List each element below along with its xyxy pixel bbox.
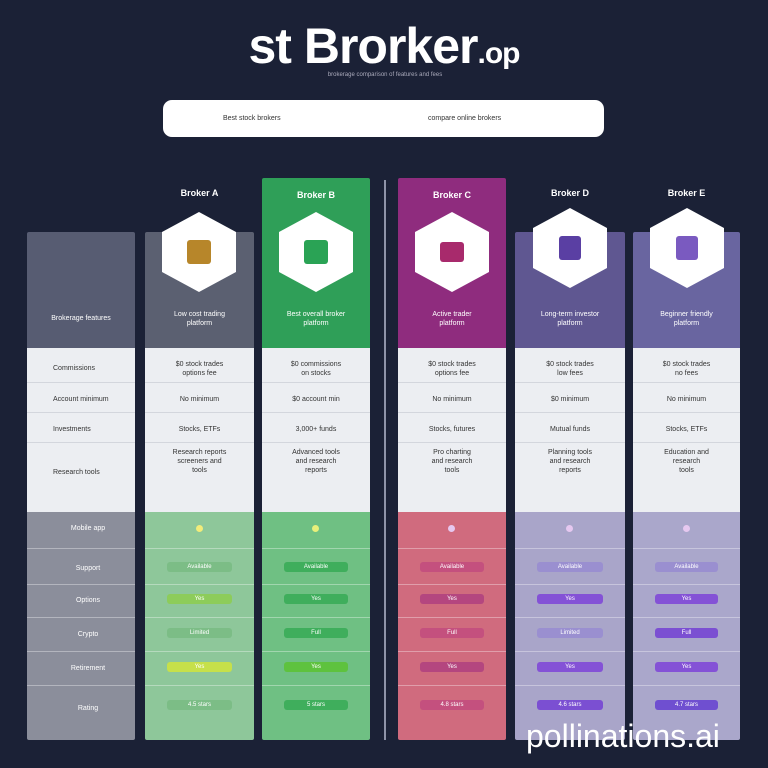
text: Yes bbox=[682, 596, 691, 602]
text: Yes bbox=[682, 664, 691, 670]
column 3 (magenta): and research bbox=[432, 458, 472, 465]
column 2 (highlight green): on stocks bbox=[301, 370, 331, 377]
column 3 (magenta): platform bbox=[439, 320, 465, 327]
text: research bbox=[673, 458, 700, 465]
subtitle: brokerage comparison of features and fees bbox=[328, 72, 442, 78]
text: Available bbox=[674, 564, 699, 570]
column 0: feature labels: Crypto bbox=[78, 631, 98, 638]
text: Beginner friendly bbox=[660, 311, 713, 318]
column 0: feature labels: Support bbox=[76, 565, 100, 572]
text: $0 minimum bbox=[551, 396, 589, 403]
column 0: feature labels: Brokerage features bbox=[51, 315, 111, 322]
column 2 (highlight green): Broker B bbox=[297, 190, 335, 200]
text: $0 stock trades bbox=[546, 361, 594, 368]
column 0: feature labels: Mobile app bbox=[71, 525, 105, 532]
text: Stocks, ETFs bbox=[179, 426, 220, 433]
icon hex 3 bbox=[415, 212, 489, 292]
text: 4.6 stars bbox=[558, 702, 582, 708]
text: platform bbox=[557, 320, 583, 327]
search bar: Best stock brokers bbox=[223, 115, 281, 122]
column 1: Broker A bbox=[181, 188, 218, 198]
column 2 (highlight green): Full bbox=[311, 630, 321, 636]
text: Low cost trading bbox=[174, 311, 225, 318]
text: $0 stock trades bbox=[176, 361, 223, 368]
column 3 (magenta) bbox=[398, 178, 506, 740]
text: Yes bbox=[195, 664, 204, 670]
column 0: feature labels: Options bbox=[76, 597, 100, 604]
column 0: feature labels: Retirement bbox=[71, 665, 105, 672]
column 2 (highlight green): and research bbox=[296, 458, 336, 465]
text: Full bbox=[682, 630, 691, 636]
column 3 (magenta): Full bbox=[447, 630, 457, 636]
column 0: feature labels: Investments bbox=[53, 426, 91, 433]
icon hex 5 bbox=[650, 208, 724, 288]
column 0: feature labels: Account minimum bbox=[53, 396, 109, 403]
column 3 (magenta): Pro charting bbox=[433, 449, 471, 456]
column 3 (magenta): Yes bbox=[447, 664, 457, 670]
column 2 (highlight green) bbox=[262, 178, 370, 740]
text: $0 stock trades bbox=[663, 361, 710, 368]
text: 4.5 stars bbox=[188, 702, 211, 708]
icon hex 2 bbox=[279, 212, 353, 292]
icon hex 4 bbox=[533, 208, 607, 288]
text: reports bbox=[559, 467, 581, 474]
divider bbox=[384, 180, 386, 740]
column 2 (highlight green): 3,000+ funds bbox=[296, 426, 336, 433]
text: No minimum bbox=[180, 396, 219, 403]
text: Stocks, ETFs bbox=[666, 426, 707, 433]
column 3 (magenta): Active trader bbox=[432, 311, 472, 318]
text: Limited bbox=[560, 630, 580, 636]
column 0: feature labels: Rating bbox=[78, 705, 98, 712]
column 4 (purple): Broker D bbox=[551, 188, 589, 198]
column 3 (magenta): Yes bbox=[447, 596, 457, 602]
text: low fees bbox=[557, 370, 583, 377]
text: 4.7 stars bbox=[675, 702, 698, 708]
column 3 (magenta): Stocks, futures bbox=[429, 426, 475, 433]
watermark: pollinations.ai bbox=[526, 718, 720, 754]
text: and research bbox=[550, 458, 590, 465]
text: Education and bbox=[664, 449, 709, 456]
text: Mutual funds bbox=[550, 426, 590, 433]
column 3 (magenta): tools bbox=[445, 467, 459, 474]
column 2 (highlight green): Available bbox=[304, 564, 328, 570]
search bar bbox=[163, 100, 604, 137]
icon hex 1 bbox=[162, 212, 236, 292]
text: Yes bbox=[565, 596, 575, 602]
search bar: compare online brokers bbox=[428, 115, 501, 122]
column 2 (highlight green): 5 stars bbox=[307, 702, 325, 708]
text: Research reports bbox=[173, 449, 226, 456]
text: tools bbox=[679, 467, 694, 474]
text: Planning tools bbox=[548, 449, 592, 456]
text: platform bbox=[674, 320, 699, 327]
column 3 (magenta): Broker C bbox=[433, 190, 471, 200]
column 3 (magenta): No minimum bbox=[432, 396, 472, 403]
text: Yes bbox=[195, 596, 204, 602]
column 0: feature labels bbox=[27, 232, 135, 740]
text: Yes bbox=[565, 664, 575, 670]
column 2 (highlight green): Yes bbox=[311, 664, 321, 670]
column 3 (magenta): Available bbox=[440, 564, 464, 570]
text: screeners and bbox=[177, 458, 222, 465]
text: platform bbox=[187, 320, 212, 327]
column 3 (magenta): $0 stock trades bbox=[428, 361, 476, 368]
column 2 (highlight green): $0 commissions bbox=[291, 361, 341, 368]
column 3 (magenta): options fee bbox=[435, 370, 469, 377]
text: Available bbox=[558, 564, 582, 570]
column 2 (highlight green): reports bbox=[305, 467, 327, 474]
column 2 (highlight green): platform bbox=[303, 320, 329, 327]
text: Limited bbox=[190, 630, 209, 636]
text: No minimum bbox=[667, 396, 706, 403]
text: Available bbox=[187, 564, 212, 570]
column 2 (highlight green): Advanced tools bbox=[292, 449, 340, 456]
text: no fees bbox=[675, 370, 698, 377]
column 2 (highlight green): Best overall broker bbox=[287, 311, 345, 318]
text: tools bbox=[192, 467, 207, 474]
column 0: feature labels: Commissions bbox=[53, 365, 95, 372]
text: options fee bbox=[182, 370, 217, 377]
column 2 (highlight green): Yes bbox=[311, 596, 321, 602]
column 2 (highlight green): $0 account min bbox=[292, 396, 340, 403]
column 3 (magenta): 4.8 stars bbox=[440, 702, 464, 708]
column 5 (purple): Broker E bbox=[668, 188, 705, 198]
text: Long-term investor bbox=[541, 311, 599, 318]
title: st Brorker.op bbox=[248, 18, 520, 74]
column 0: feature labels: Research tools bbox=[53, 469, 100, 476]
